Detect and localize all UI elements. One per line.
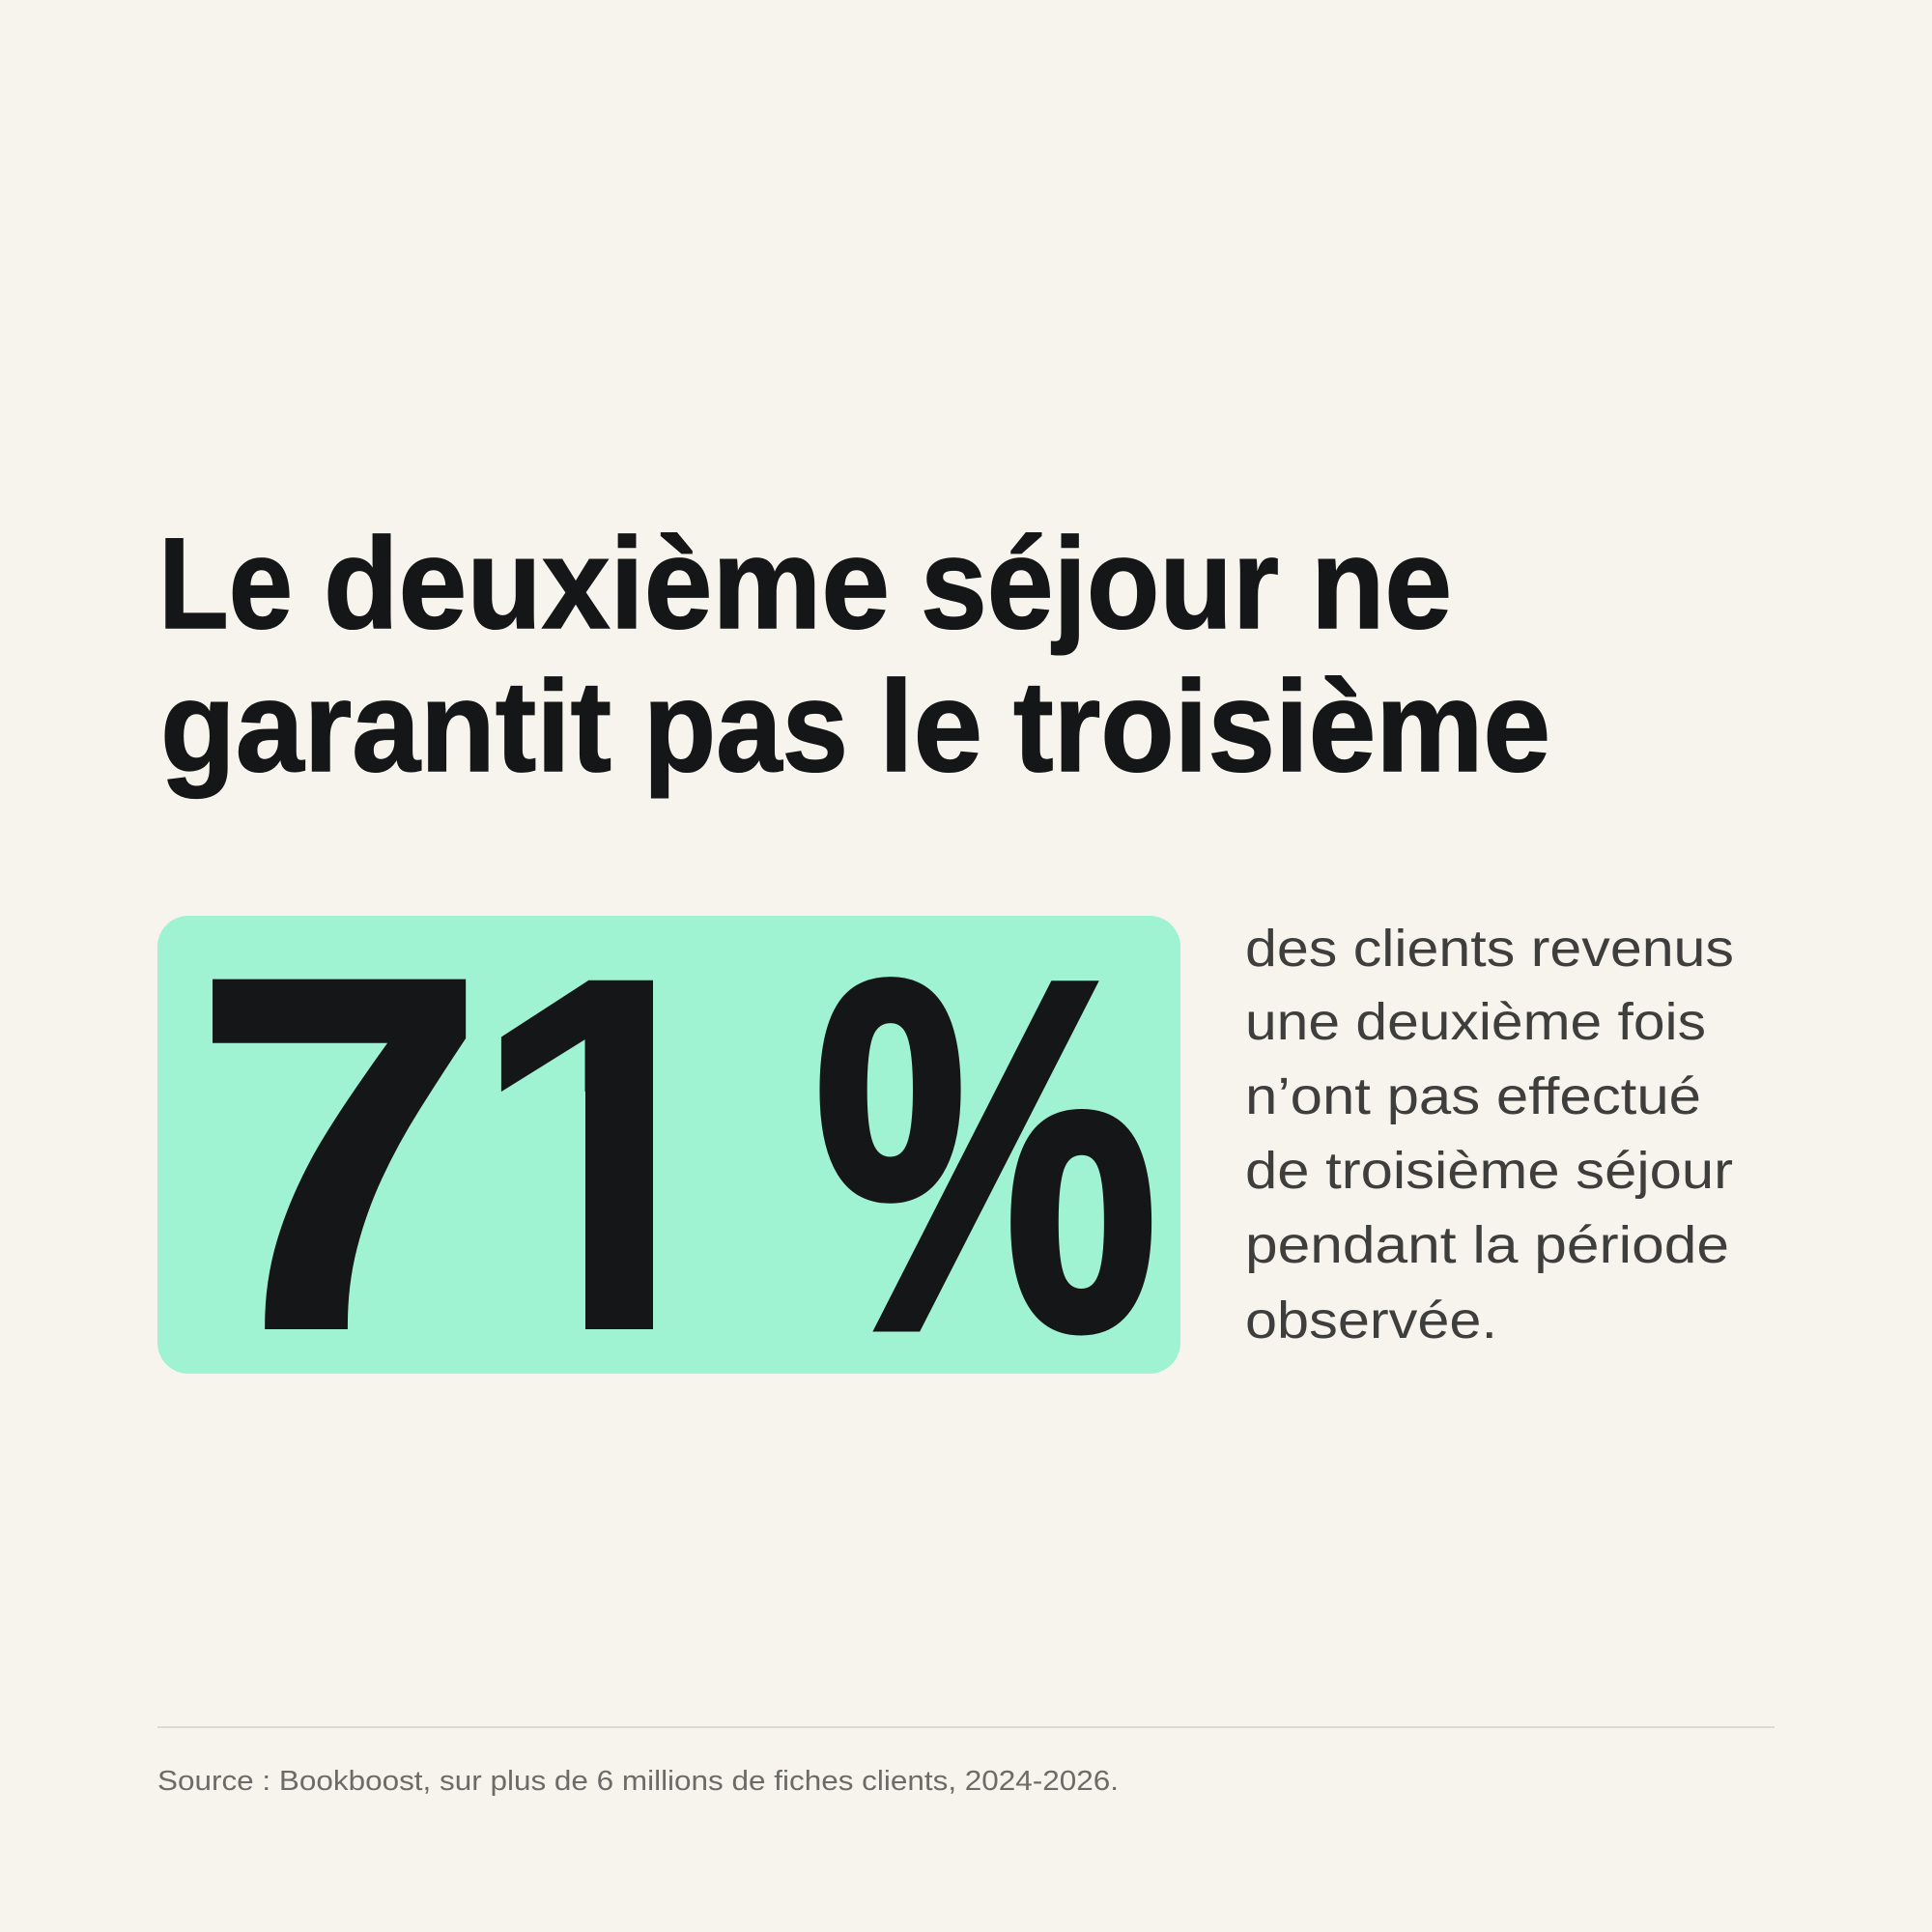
big number 71 % bbox=[213, 977, 1151, 1335]
description text: des clients revenus bbox=[1245, 920, 1734, 978]
title: garantit bbox=[160, 655, 611, 799]
title: Le bbox=[158, 512, 293, 656]
description text: pendant la période bbox=[1245, 1216, 1729, 1274]
title: ne bbox=[1311, 512, 1452, 656]
title: troisième bbox=[1013, 655, 1550, 799]
description text: observée. bbox=[1245, 1292, 1497, 1350]
description text: de troisième séjour bbox=[1245, 1142, 1733, 1200]
description text: une deuxième fois bbox=[1245, 993, 1706, 1051]
panel: 71 % statistic bbox=[157, 916, 1180, 1374]
title: deuxième bbox=[324, 512, 890, 656]
description text bbox=[1245, 920, 1734, 1350]
title bbox=[158, 512, 1550, 799]
big number 71 %: % bbox=[813, 877, 1158, 1433]
description text: n’ont pas effectué bbox=[1245, 1067, 1701, 1125]
title: le bbox=[879, 655, 982, 799]
title: séjour bbox=[921, 512, 1279, 656]
big number 71 %: 7 bbox=[194, 875, 485, 1431]
source note: Source : Bookboost, sur plus de 6 millions de fiches clients, 2024-2026. bbox=[157, 1766, 1119, 1797]
title: pas bbox=[643, 655, 848, 799]
big number 71 %: 1 bbox=[467, 871, 749, 1437]
